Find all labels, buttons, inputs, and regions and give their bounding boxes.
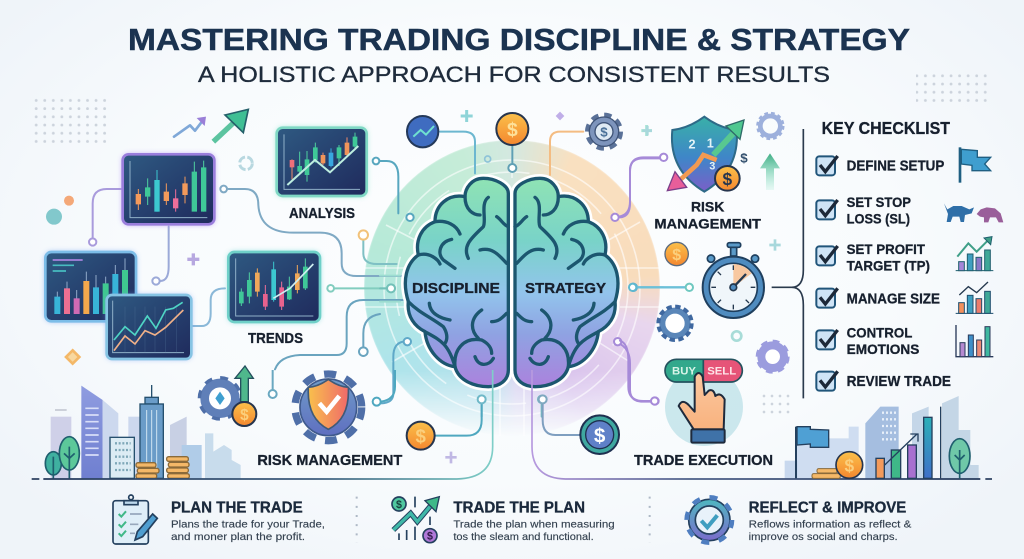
coins [812, 452, 863, 478]
icon: risk shield: 1 [707, 136, 714, 150]
connector rings [387, 164, 659, 405]
step: reflect and improve: REFLECT & IMPROVE [749, 500, 906, 517]
icon: clipboard [113, 495, 157, 544]
icon: size chart [956, 282, 993, 313]
icon: purple gear [757, 341, 788, 372]
bottom-right skyline [532, 370, 992, 479]
icon: up arrow [760, 153, 780, 190]
checklist item: manage size: MANAGE SIZE [847, 291, 940, 307]
checklist item: define setup [816, 156, 945, 175]
checklist item: review trade [816, 371, 951, 391]
brain label: discipline: DISCIPLINE [412, 281, 500, 297]
icon: growth coin [407, 116, 438, 147]
decorative dot grid right [916, 70, 992, 105]
label: trade execution: TRADE EXECUTION [634, 453, 773, 469]
brain background disc [364, 140, 660, 436]
icon: profit chart [956, 237, 993, 271]
icon: risk shield: $ [723, 169, 733, 189]
title: MASTERING TRADING DISCIPLINE & STRATEGY [128, 22, 910, 57]
icon: stopwatch [703, 243, 764, 318]
step: reflect and improve: Reflows information as reflect & [749, 520, 911, 531]
checklist item: control emotions [816, 324, 919, 357]
label: risk management: MANAGEMENT [654, 215, 761, 231]
icon: dollar coin: $ [507, 120, 518, 141]
coins: $ [845, 456, 855, 476]
connector rings [89, 158, 395, 356]
icon: trade arrow [392, 497, 439, 543]
brain left hemisphere [405, 178, 508, 387]
icon: risk shield [667, 117, 748, 192]
chart: analysis candlesticks [277, 128, 367, 196]
icon: trade arrow: $ [427, 531, 433, 543]
icon: risk shield: 3 [709, 160, 715, 172]
connectors left [93, 161, 403, 369]
bracket [772, 129, 803, 398]
checklist item: control emotions: CONTROL [847, 324, 913, 340]
teal ring [732, 331, 741, 341]
checklist item: control emotions: EMOTIONS [847, 341, 919, 357]
chart: bar chart left [45, 252, 136, 321]
swirl icon [240, 157, 252, 170]
chart: trends candlesticks [228, 252, 320, 322]
trees [45, 437, 79, 478]
connector ring [651, 397, 658, 405]
buildings [51, 385, 241, 478]
purple ground curve [532, 370, 980, 479]
white brain outline [405, 178, 618, 387]
brain label: strategy: STRATEGY [525, 281, 606, 297]
decorative dot grid left [34, 94, 108, 148]
connector with ring [373, 370, 395, 406]
checklist item: define setup: DEFINE SETUP [847, 159, 945, 175]
icon: emotions chart [956, 325, 993, 357]
chart: line chart [107, 295, 191, 359]
checklist item: review trade: REVIEW TRADE [847, 374, 951, 390]
connectors around brain [380, 132, 663, 417]
step: plan the trade: Plans the trade for your Trade, [171, 520, 325, 531]
connector: buy sell [620, 341, 651, 401]
button: buy sell [665, 359, 742, 382]
step: plan the trade: PLAN THE TRADE [171, 500, 303, 517]
icon: shield gear [295, 374, 362, 441]
decorative plus [445, 452, 457, 463]
connector: stopwatch [629, 284, 693, 291]
step: trade the plan: Trade the plan when measuring [453, 520, 615, 531]
dotted divider [354, 497, 360, 543]
circuit lines inside disc [364, 140, 660, 436]
connector and coin: $ [594, 425, 606, 448]
decorative plus and diamond marks [461, 110, 652, 162]
connector ring [660, 154, 667, 161]
left chart cluster [45, 109, 403, 369]
growth bars [876, 417, 932, 478]
icon: coin: $ [672, 247, 681, 264]
label: analysis: ANALYSIS [289, 206, 355, 222]
icon: gear with up arrow and coin: $ [240, 407, 249, 424]
checklist item: set stop loss [816, 194, 911, 226]
bottom-left skyline and risk management [32, 366, 493, 479]
coin with connector [407, 395, 486, 450]
icon: dark gear [658, 307, 692, 340]
step: reflect and improve: improve os social and charps. [749, 532, 898, 543]
connector and coin [539, 395, 619, 454]
tall pole [939, 407, 943, 478]
chart: purple candlesticks [123, 154, 214, 224]
bottom section [113, 495, 911, 544]
icon: bull and bear [944, 203, 1003, 222]
hand circle backdrop [665, 368, 743, 446]
icon: risk shield: $ [740, 150, 748, 165]
step: trade the plan: TRADE THE PLAN [453, 500, 585, 517]
checklist item: set profit target [816, 241, 930, 273]
icon: dollar gear [587, 115, 621, 148]
icon: coin [665, 242, 688, 266]
icon: flag [796, 427, 829, 478]
dot grid [763, 395, 789, 413]
icon: dollar gear: $ [600, 125, 608, 140]
brain right hemisphere [515, 178, 618, 387]
checklist item: set profit target: TARGET (TP) [847, 257, 930, 273]
decorative plus marks [643, 126, 781, 251]
arrows top [174, 109, 248, 142]
label: risk management [654, 199, 761, 231]
label: risk management: RISK MANAGEMENT [257, 453, 402, 469]
icon: hand pressing button [679, 373, 725, 443]
brain [380, 110, 663, 417]
icon: trade arrow: $ [396, 499, 402, 511]
key checklist heading: KEY CHECKLIST [822, 118, 950, 138]
step: trade the plan [392, 497, 615, 543]
dotted divider [647, 497, 653, 543]
step: trade the plan: tos the sleam and functional. [453, 532, 594, 543]
button: buy sell: SELL [707, 366, 736, 378]
coin stacks [136, 457, 189, 478]
step: plan the trade: and moner plan the profit. [171, 532, 305, 543]
icon: risk shield: 2 [688, 137, 696, 151]
step: plan the trade [113, 495, 325, 544]
button: buy sell: BUY [672, 366, 696, 378]
checklist item: set profit target: SET PROFIT [847, 241, 925, 257]
label: risk management: RISK [691, 199, 724, 215]
label: trends: TRENDS [248, 331, 303, 347]
icon: reflect gear [687, 497, 732, 543]
right section [620, 113, 1003, 413]
icon: gear with up arrow and coin [199, 366, 256, 426]
checklist item: manage size [816, 288, 940, 308]
coin with connector: $ [415, 426, 426, 447]
ground line [32, 370, 493, 479]
checklist item: set stop loss: SET STOP [847, 194, 911, 210]
step: reflect and improve [687, 497, 911, 543]
connector: risk [620, 157, 659, 217]
ground dash [985, 476, 992, 481]
tree [949, 439, 970, 478]
connector with ring [269, 370, 277, 398]
decorative dots [46, 196, 199, 364]
checklist item: set stop loss: LOSS (SL) [847, 210, 910, 226]
icon: light gear [758, 113, 783, 139]
buildings [785, 396, 979, 478]
icon: dollar coin [496, 113, 528, 145]
window dots [882, 413, 897, 439]
subtitle: A HOLISTIC APPROACH FOR CONSISTENT RESULTS [198, 62, 830, 87]
icon: flag [960, 147, 991, 183]
